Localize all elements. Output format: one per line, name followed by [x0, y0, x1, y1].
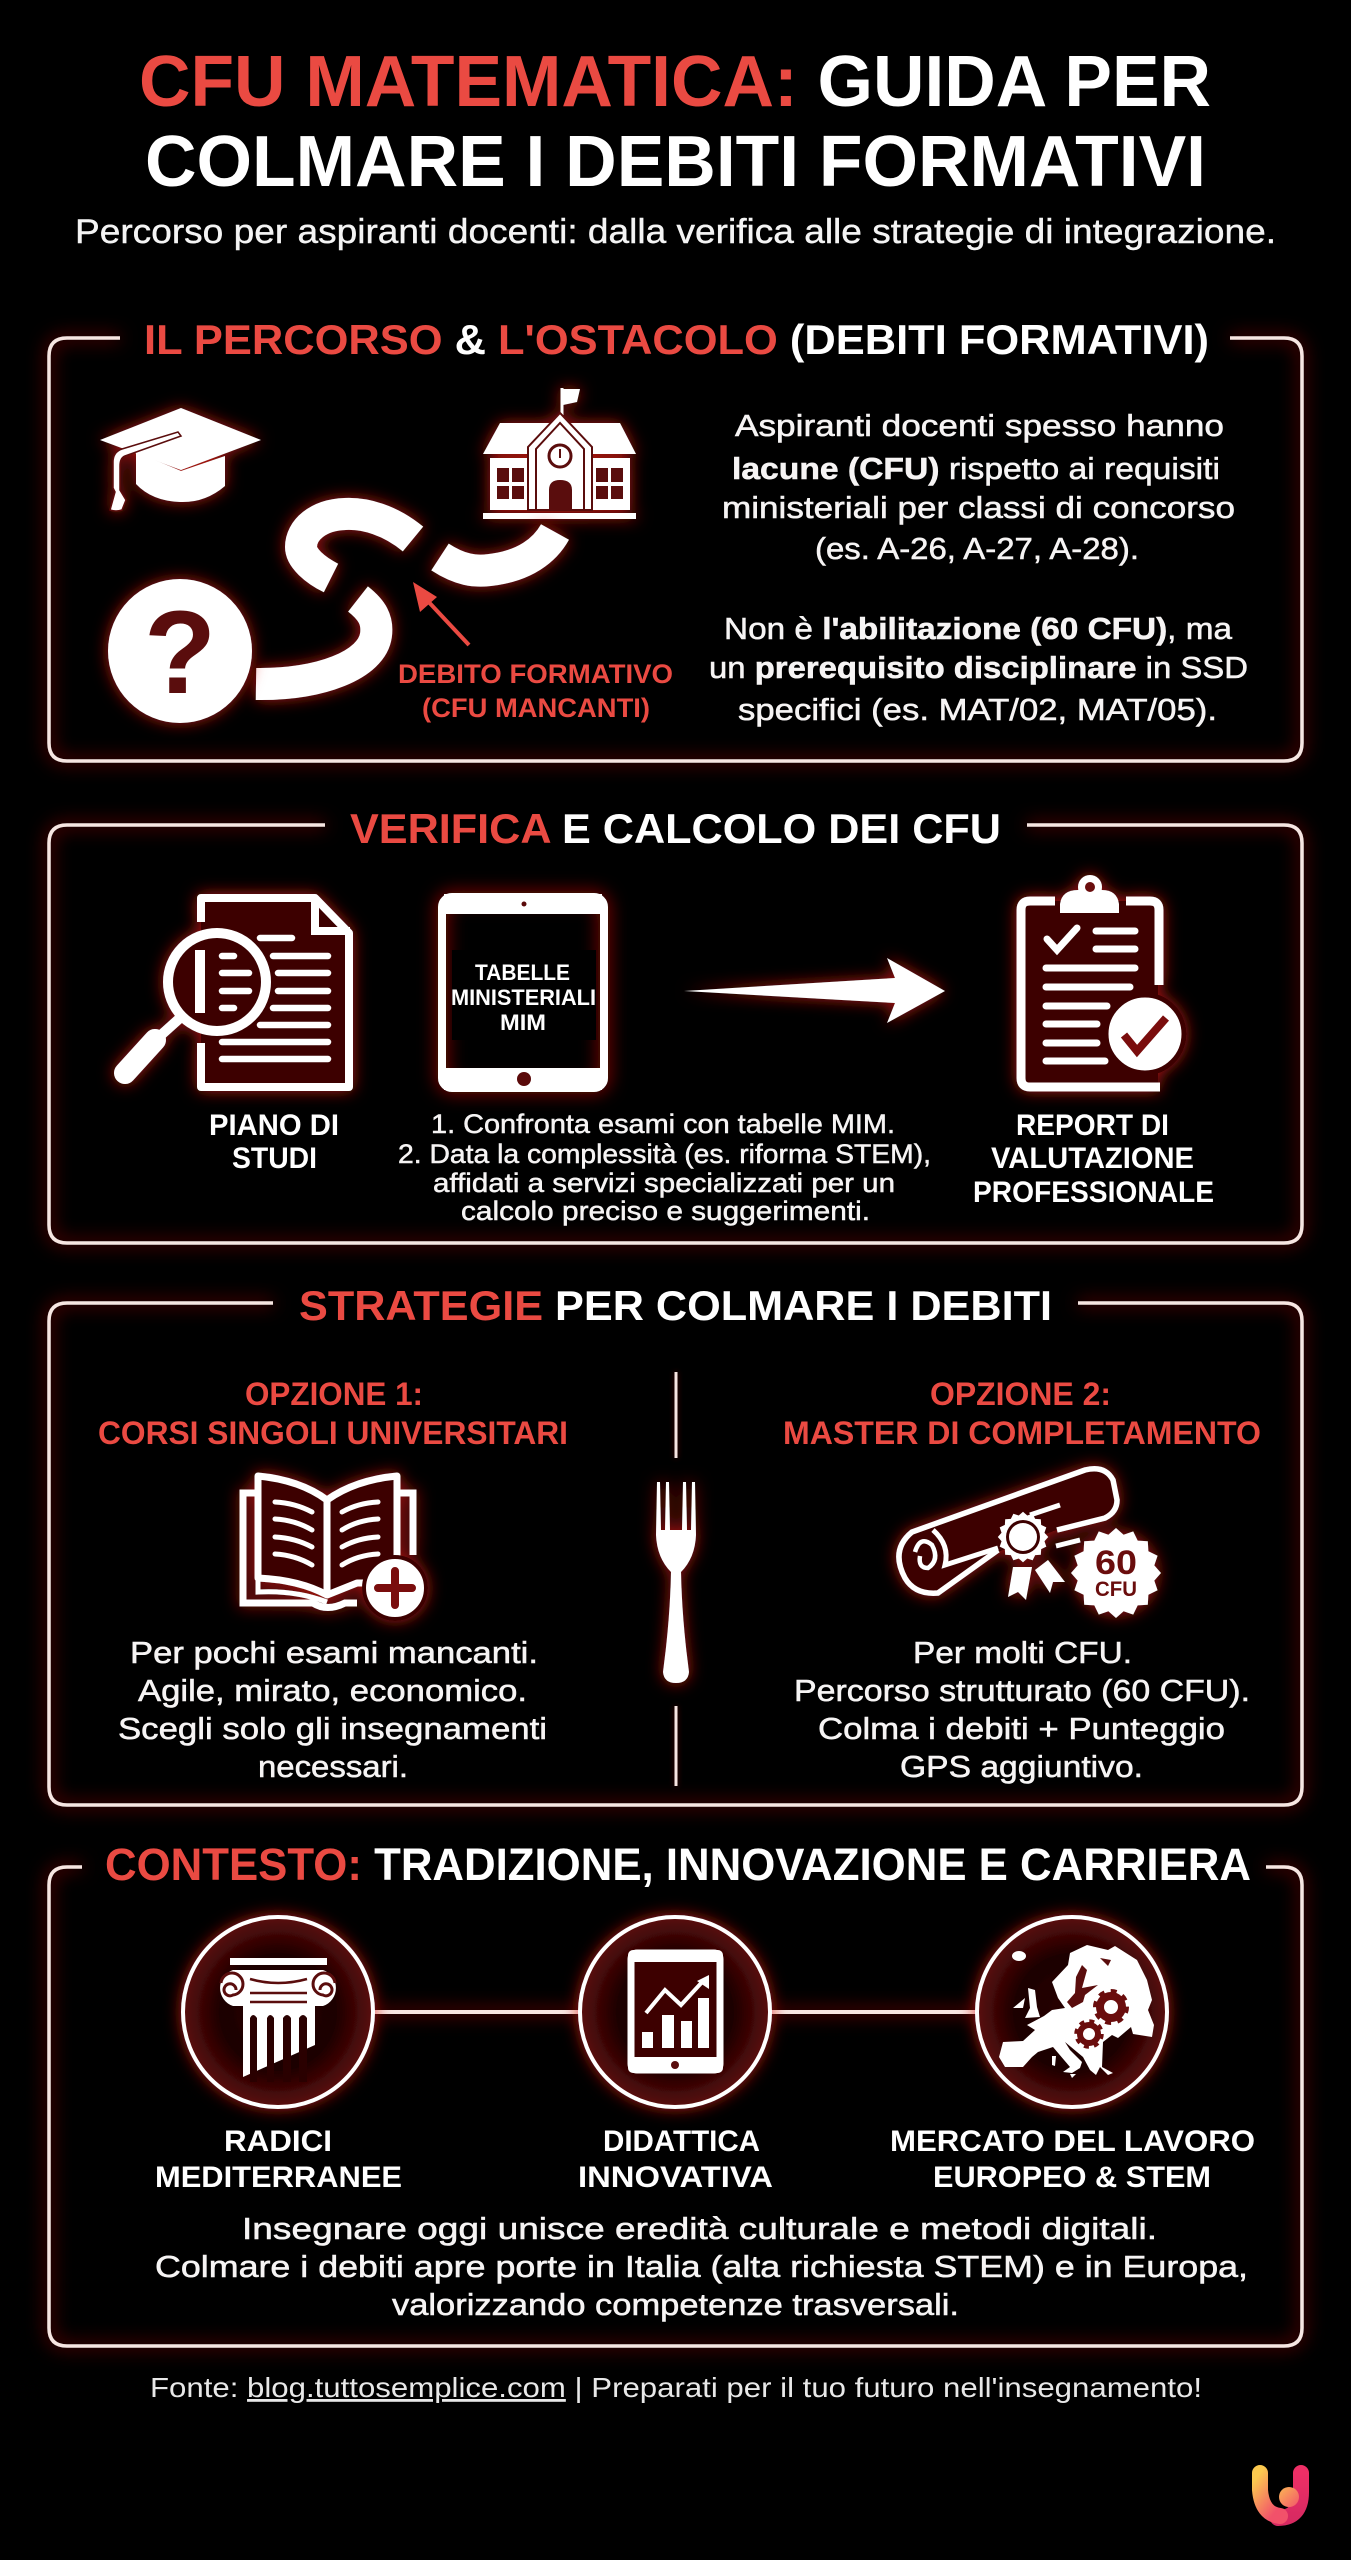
heading: opzione 2 — [783, 1376, 1261, 1451]
label: report di valutazione: REPORT DI — [1016, 1109, 1169, 1142]
text: descrizione del percorso: Non è l'abilitazione (60 CFU) , ma — [724, 611, 1233, 646]
heading: opzione 2: OPZIONE 2: — [930, 1376, 1111, 1412]
icon: diploma 60 cfu: 60 — [1095, 1544, 1137, 1582]
text: opzione 1: necessari. — [258, 1749, 408, 1784]
heading: contesto: CONTESTO: TRADIZIONE, INNOVAZIONE E CARRIERA — [105, 1839, 1251, 1890]
text: conclusione contesto: valorizzando competenze trasversali. — [392, 2287, 959, 2322]
icon: school building — [483, 388, 636, 519]
text: opzione 2: Colma i debiti + Punteggio — [818, 1711, 1225, 1746]
heading: opzione 1: OPZIONE 1: — [245, 1376, 423, 1412]
title: CFU MATEMATICA: GUIDA PER — [139, 42, 1211, 122]
arrow: debito formativo — [413, 582, 469, 645]
heading: strategie: STRATEGIE PER COLMARE I DEBITI — [299, 1282, 1052, 1329]
label: piano di studi: STUDI — [232, 1142, 317, 1175]
text: descrizione del percorso: ministeriali per classi di concorso — [722, 490, 1235, 525]
label: mercato del lavoro: MERCATO DEL LAVORO — [890, 2125, 1255, 2158]
icon: broken path — [256, 514, 555, 684]
text: istruzioni verifica: 1. Confronta esami con tabelle MIM. — [431, 1109, 895, 1139]
text: conclusione contesto — [155, 2211, 1248, 2322]
heading: opzione 2: MASTER DI COMPLETAMENTO — [783, 1415, 1261, 1451]
label: report di valutazione — [973, 1109, 1214, 1209]
text: conclusione contesto: Insegnare oggi unisce eredità culturale e metodi digitali. — [242, 2211, 1157, 2246]
text: opzione 2 — [794, 1635, 1250, 1784]
label: didattica innovativa — [578, 2125, 773, 2194]
icon: tablet tabelle ministeriali — [442, 894, 604, 1090]
label: report di valutazione: VALUTAZIONE — [991, 1142, 1194, 1175]
text: opzione 1 — [118, 1635, 547, 1784]
heading: opzione 1 — [98, 1376, 568, 1451]
title: COLMARE I DEBITI FORMATIVI — [145, 122, 1206, 202]
icon: colonna — [183, 1917, 373, 2107]
arrow: verso il report — [684, 958, 945, 1023]
text: opzione 1: Per pochi esami mancanti. — [130, 1635, 538, 1670]
text: istruzioni verifica: affidati a servizi specializzati per un — [433, 1168, 895, 1198]
text: conclusione contesto: Colmare i debiti apre porte in Italia (alta richiesta STEM) e in Europa, — [155, 2249, 1248, 2284]
label: piano di studi — [209, 1109, 339, 1175]
icon: logo — [1260, 2473, 1301, 2518]
panel: il percorso e l'ostacolo — [49, 316, 1302, 761]
text: opzione 2: Per molti CFU. — [913, 1635, 1132, 1670]
icon: forchetta — [656, 1482, 696, 1683]
label: piano di studi: PIANO DI — [209, 1109, 339, 1142]
footer: fonte: Fonte: blog.tuttosemplice.com | Preparati per il tuo futuro nell'insegnamento! — [150, 2372, 1202, 2403]
label: report di valutazione: PROFESSIONALE — [973, 1176, 1214, 1209]
label: radici mediterranee: MEDITERRANEE — [155, 2161, 402, 2194]
label: didattica innovativa: INNOVATIVA — [578, 2161, 773, 2194]
heading: verifica: VERIFICA E CALCOLO DEI CFU — [350, 805, 1001, 852]
icon: question mark: ? — [144, 587, 216, 719]
icon: tablet tabelle ministeriali: MINISTERIALI — [451, 985, 596, 1010]
callout: debito formativo: (CFU MANCANTI) — [422, 693, 650, 723]
text: descrizione del percorso — [709, 408, 1248, 727]
text: descrizione del percorso: un prerequisito disciplinare in SSD — [709, 650, 1248, 685]
text: opzione 1: Agile, mirato, economico. — [138, 1673, 527, 1708]
label: didattica innovativa: DIDATTICA — [603, 2125, 760, 2158]
text: opzione 1: Scegli solo gli insegnamenti — [118, 1711, 547, 1746]
label: mercato del lavoro: EUROPEO & STEM — [933, 2161, 1211, 2194]
icon: tablet con grafico — [580, 1917, 770, 2107]
panel: verifica e calcolo — [49, 805, 1302, 1243]
label: radici mediterranee — [155, 2125, 402, 2194]
icon: libro con piu — [243, 1476, 426, 1619]
text: descrizione del percorso: specifici (es. MAT/02, MAT/05). — [738, 692, 1217, 727]
icon: piano di studi — [125, 898, 350, 1087]
subtitle: Percorso per aspiranti docenti: dalla verifica alle strategie di integrazione. — [75, 213, 1276, 251]
title — [139, 42, 1211, 202]
text: descrizione del percorso: (es. A-26, A-27, A-28). — [815, 531, 1139, 566]
callout: debito formativo: DEBITO FORMATIVO — [398, 659, 673, 689]
text: descrizione del percorso: lacune (CFU) rispetto ai requisiti — [732, 451, 1220, 486]
icon: tablet tabelle ministeriali: TABELLE — [475, 960, 570, 985]
heading: opzione 1: CORSI SINGOLI UNIVERSITARI — [98, 1415, 568, 1451]
label: radici mediterranee: RADICI — [224, 2125, 332, 2158]
icon: mappa europa — [977, 1917, 1167, 2107]
label: mercato del lavoro — [890, 2125, 1255, 2194]
icon: question mark — [108, 579, 252, 723]
icon: diploma 60 cfu — [899, 1469, 1161, 1618]
panel: contesto — [49, 1839, 1302, 2346]
text: istruzioni verifica — [398, 1109, 931, 1226]
icon: graduation cap — [100, 408, 261, 511]
heading: il percorso: IL PERCORSO & L'OSTACOLO (DEBITI FORMATIVI) — [144, 316, 1209, 363]
text: opzione 2: Percorso strutturato (60 CFU). — [794, 1673, 1250, 1708]
callout: debito formativo — [398, 659, 673, 723]
text: istruzioni verifica: calcolo preciso e suggerimenti. — [461, 1196, 870, 1226]
panel: strategie — [49, 1282, 1302, 1805]
text: istruzioni verifica: 2. Data la complessità (es. riforma STEM), — [398, 1139, 931, 1169]
icon: diploma 60 cfu: CFU — [1095, 1578, 1137, 1601]
icon: tablet tabelle ministeriali: MIM — [500, 1010, 546, 1035]
text: descrizione del percorso: Aspiranti docenti spesso hanno — [735, 408, 1224, 443]
icon: report clipboard — [1021, 875, 1184, 1087]
text: opzione 2: GPS aggiuntivo. — [900, 1749, 1143, 1784]
